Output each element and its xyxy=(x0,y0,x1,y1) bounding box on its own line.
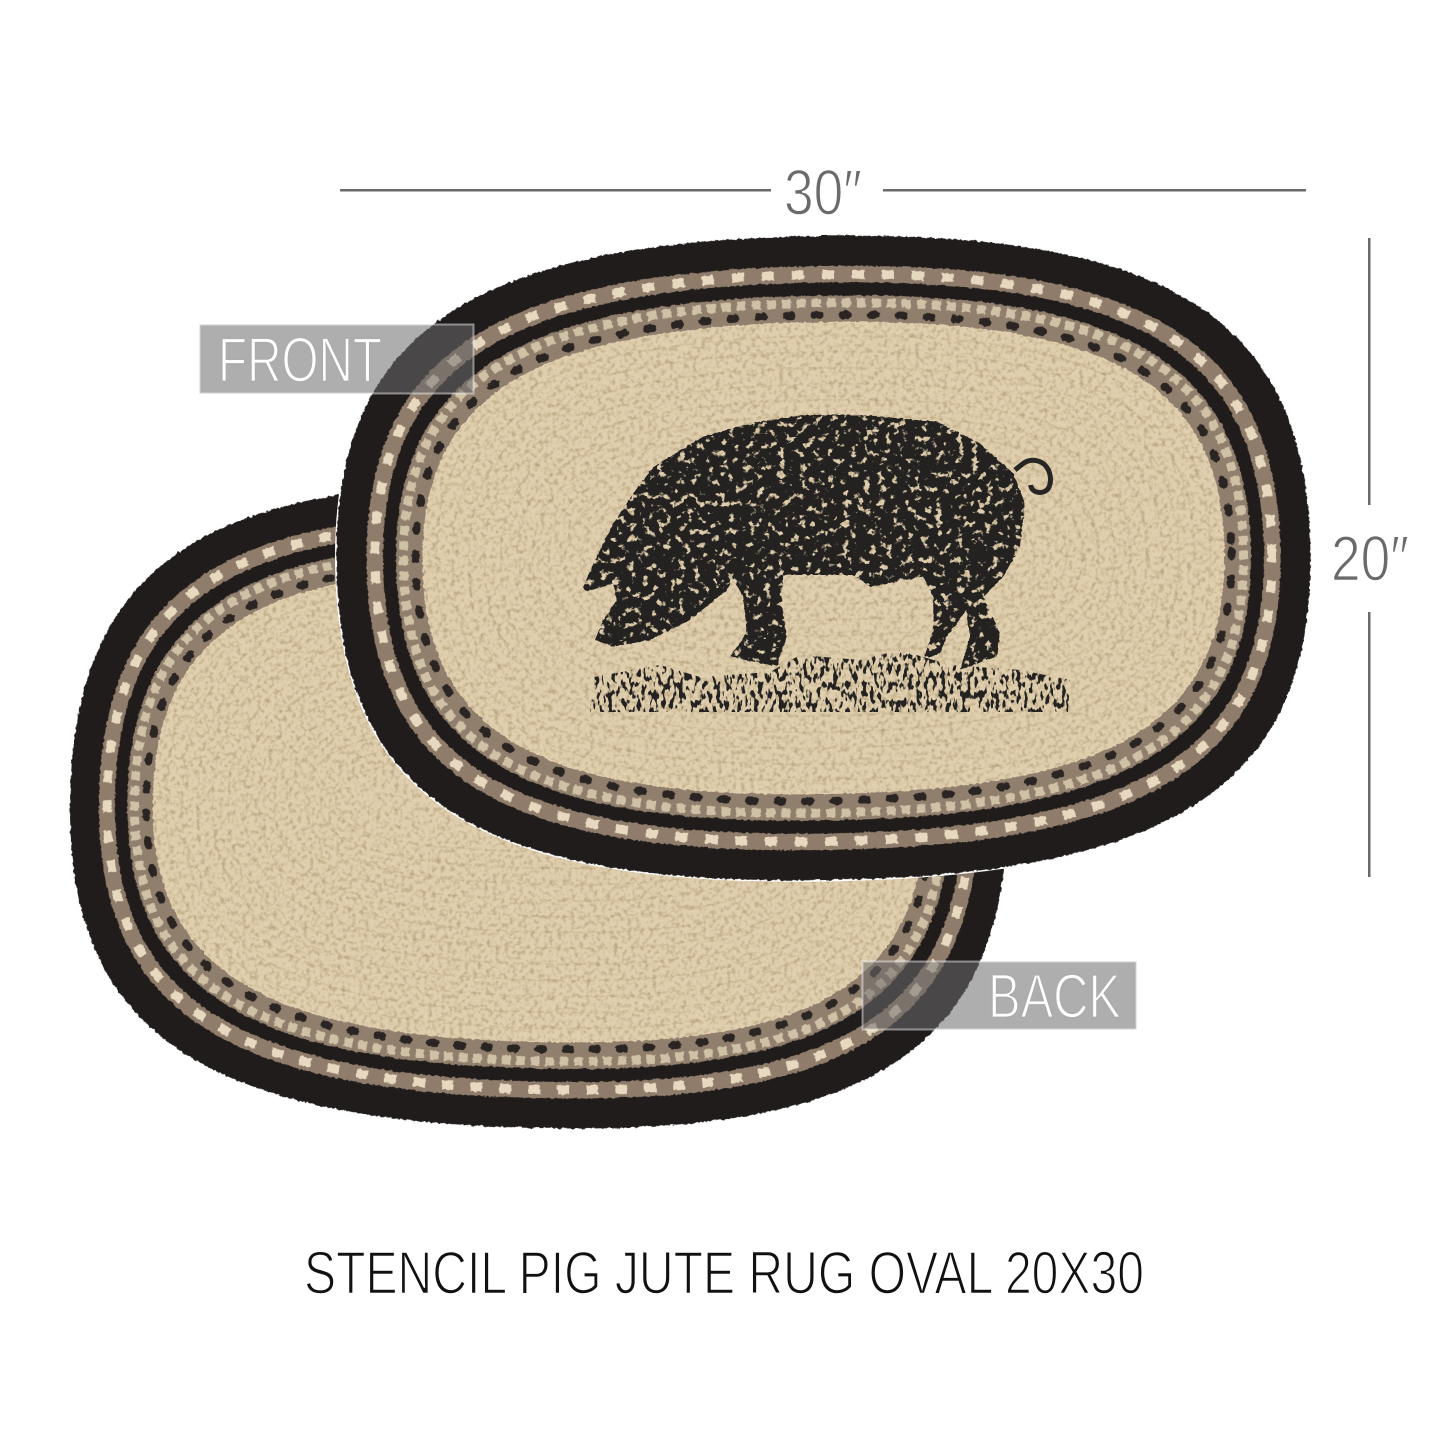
rug front body xyxy=(331,228,1316,888)
front label: FRONT xyxy=(218,326,382,396)
back label xyxy=(862,962,1136,1032)
pig tail xyxy=(1015,460,1050,492)
pig stencil xyxy=(583,415,1025,670)
height dimension: 20 inches: 20″ xyxy=(1331,522,1409,594)
rug back side xyxy=(62,472,1016,1140)
back label: BACK xyxy=(988,962,1121,1032)
product title: STENCIL PIG JUTE RUG OVAL 20X30 xyxy=(304,1240,1144,1306)
rug front side xyxy=(331,228,1316,888)
grass under the pig xyxy=(590,650,1070,712)
width dimension: 30 inches: 30″ xyxy=(784,156,862,228)
